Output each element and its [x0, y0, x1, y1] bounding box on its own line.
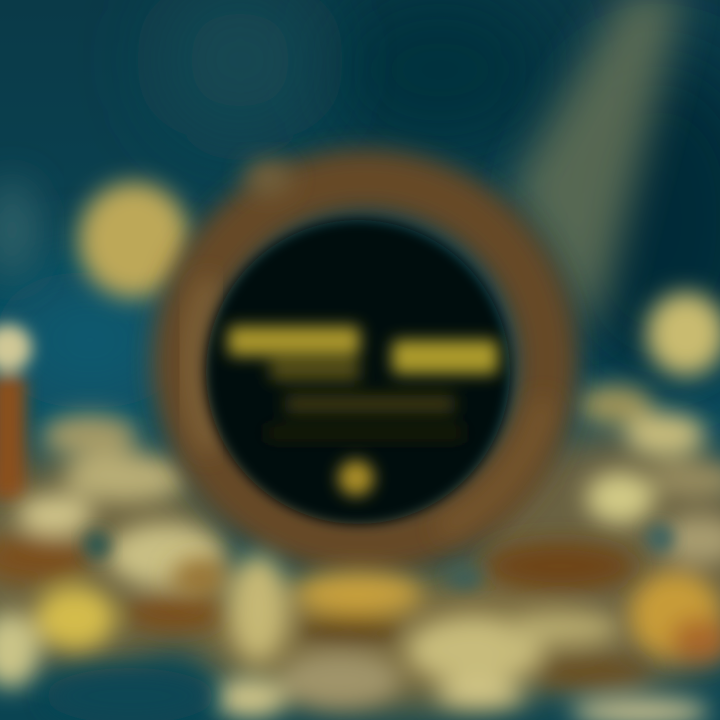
blurred gold title	[228, 326, 498, 438]
coin pile: left	[0, 414, 225, 688]
bottle: left edge	[0, 324, 32, 500]
ring: bronze outer frame	[183, 160, 547, 544]
gap: muted teal between left coins	[84, 531, 110, 559]
pile underlay: dark olive base	[0, 430, 720, 710]
dial: black inner circle	[206, 220, 510, 524]
coin: upper right	[646, 292, 720, 376]
coin: upper left	[78, 182, 190, 298]
table shadow: bottom left teal	[45, 668, 215, 720]
coin pile: front centre	[172, 542, 710, 720]
light beam: upper right	[510, 0, 685, 340]
coin: far left background	[0, 180, 38, 280]
gap: muted teal near front coins	[447, 567, 483, 589]
gap: muted teal near right coins	[646, 524, 674, 552]
coin pile: right	[577, 385, 720, 662]
dial emblem: small gold coin	[338, 460, 374, 496]
